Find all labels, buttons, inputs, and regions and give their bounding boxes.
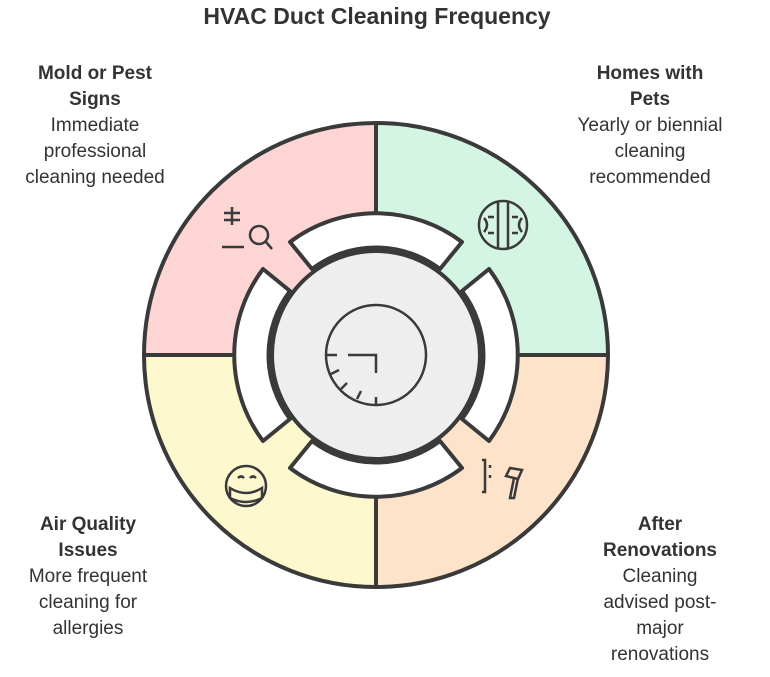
text: pets: cleaning: [615, 141, 685, 162]
text: pets: [577, 63, 723, 188]
text: renovations: [603, 514, 717, 665]
title: HVAC Duct Cleaning Frequency: [203, 3, 551, 29]
icon: clock: [326, 305, 426, 405]
text: air quality: Air Quality: [40, 514, 136, 535]
text: renovations: Cleaning: [622, 566, 698, 587]
center circle: [272, 251, 480, 459]
quadrant: air quality: [144, 355, 376, 587]
text: air quality: [29, 514, 147, 639]
quadrant: renovations: [376, 355, 608, 587]
quadrant: pets: [376, 123, 608, 355]
text: pets: Yearly or biennial: [577, 115, 723, 136]
text: mold: professional: [44, 141, 146, 162]
text: renovations: Renovations: [603, 540, 717, 561]
text: mold: [25, 63, 165, 188]
icon: hammer: [482, 460, 522, 498]
icon: pet ball: [479, 201, 527, 249]
text: renovations: After: [638, 514, 682, 535]
text: pets: Homes with: [597, 63, 703, 84]
text: renovations: advised post-: [603, 592, 716, 613]
white ring segments: [234, 213, 518, 497]
text: air quality: cleaning for: [39, 592, 137, 613]
text: air quality: Issues: [58, 540, 118, 561]
text: pets: Pets: [630, 89, 670, 110]
icon: bug magnifier: [222, 207, 272, 249]
text: mold: Mold or Pest: [38, 63, 152, 84]
text: air quality: allergies: [53, 618, 123, 639]
text: mold: Signs: [69, 89, 121, 110]
text: mold: cleaning needed: [25, 167, 165, 188]
text: renovations: renovations: [611, 644, 709, 665]
text: renovations: major: [636, 618, 684, 639]
text: air quality: More frequent: [29, 566, 147, 587]
text: mold: Immediate: [51, 115, 139, 136]
icon: mask face: [226, 466, 266, 506]
quadrant: mold: [144, 123, 376, 355]
text: pets: recommended: [589, 167, 711, 188]
